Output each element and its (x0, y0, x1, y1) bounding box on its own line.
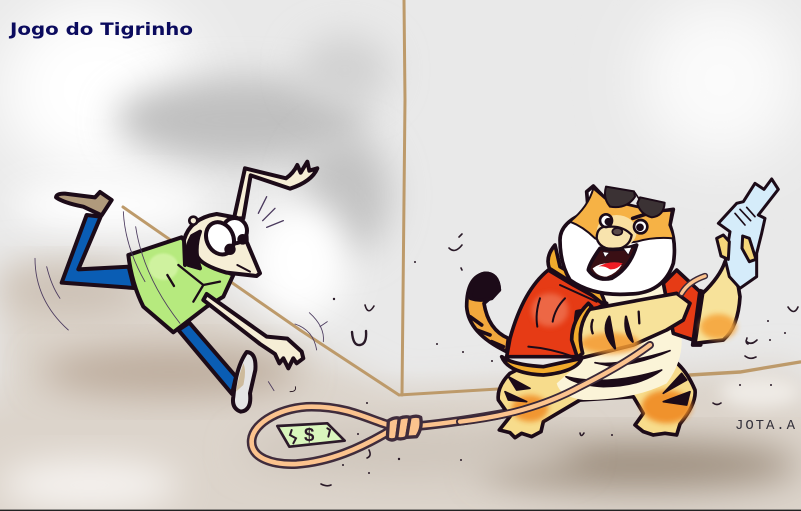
man: front shoe (233, 352, 255, 412)
tiger (460, 186, 740, 438)
man: shirt (128, 237, 233, 332)
bottom border (0, 510, 801, 511)
man: lower arm (203, 294, 303, 368)
revolver body (718, 179, 778, 288)
tiger: rope across body (460, 345, 650, 422)
dots (333, 261, 786, 474)
tiger: stripes (505, 351, 690, 405)
revolver cylinder ribs (735, 207, 755, 225)
tiger: tail (467, 273, 508, 352)
man: mouth (187, 232, 200, 268)
rope tail (418, 411, 520, 426)
tiger: belly and chest (557, 280, 682, 400)
tiger: sleeve end (572, 303, 592, 357)
tiger: head (560, 186, 674, 294)
tiger: jacket hem (502, 357, 582, 375)
rope loop (252, 407, 388, 464)
man: head (184, 214, 260, 276)
tiger: raised arm (695, 262, 740, 343)
man: eyes (222, 218, 247, 243)
wall and floor lines (123, 0, 800, 395)
noose and rope: $ (304, 424, 315, 445)
title: Jogo do Tigrinho (9, 20, 193, 40)
man: raised arm (234, 162, 317, 218)
tiger: jacket (663, 270, 702, 340)
debris and specks (321, 234, 798, 486)
man falling (35, 162, 327, 412)
tiger: hood collar (548, 245, 607, 307)
noose and rope (252, 407, 520, 464)
tiger: muzzle (597, 226, 632, 249)
banknote symbols (290, 428, 330, 443)
tiger: sunglasses (605, 187, 635, 207)
banknote (277, 423, 345, 447)
tiger: legs (498, 360, 695, 438)
rope knot (387, 416, 421, 440)
revolver (717, 179, 778, 288)
man: motion lines (35, 197, 327, 392)
signature: JOTA.A (735, 418, 796, 434)
man: back shoe (56, 192, 112, 215)
tiger: mouth (588, 245, 637, 279)
tiger: forearm (576, 293, 690, 358)
man: front leg (178, 323, 236, 394)
tiger: eyes (600, 214, 612, 227)
tiger: rope in hand (682, 276, 705, 293)
tiger: hand on revolver (717, 235, 756, 262)
tiger: sleeve cuff (693, 291, 706, 345)
man: back leg (62, 215, 134, 288)
